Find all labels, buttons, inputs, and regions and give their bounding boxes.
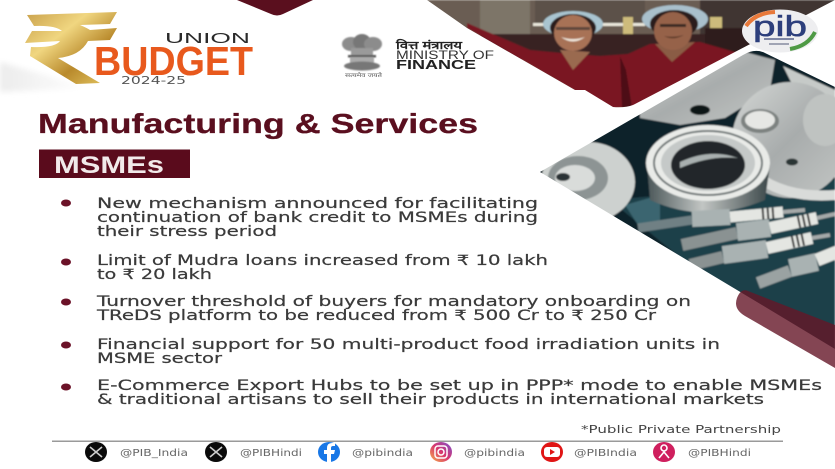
handle: PIB_India: @PIB_India — [120, 448, 188, 459]
handle: PIBIndia: @PIBIndia — [574, 448, 637, 459]
handle: pibindia: @pibindia — [352, 448, 413, 459]
UNION label: UNION — [165, 30, 250, 47]
list item: Mudra loans: Limit of Mudra loans increased from ₹ 10 lakh — [97, 253, 548, 269]
icon: Koo-style app — [653, 442, 675, 462]
handle: PIBHindi: @PIBHindi — [240, 448, 302, 459]
worker 2 — [642, 5, 708, 50]
list item: credit mechanism: New mechanism announced for facilitating — [97, 196, 538, 212]
list item: Mudra loans — [61, 253, 548, 283]
handle: pibindia: @pibindia — [464, 448, 525, 459]
list item: food irradiation — [61, 337, 720, 367]
list item: credit mechanism: continuation of bank credit to MSMEs during — [97, 210, 538, 226]
icon: PIB logo — [742, 10, 818, 52]
Union Budget logo — [25, 12, 253, 87]
finance label: FINANCE — [396, 58, 476, 72]
list item: food irradiation: MSME sector — [97, 351, 222, 367]
icon: Facebook — [318, 442, 340, 462]
list item: TReDS threshold — [61, 294, 691, 324]
list item: export hubs: & traditional artisans to sell their products in international markets — [97, 392, 764, 408]
Ministry of Finance block — [342, 34, 494, 79]
spark plugs — [638, 210, 835, 283]
BUDGET label: BUDGET — [94, 38, 253, 84]
social media footer — [85, 442, 751, 462]
year label: 2024-25 — [121, 75, 186, 87]
icon: X — [205, 442, 227, 462]
footnote: *Public Private Partnership — [581, 423, 781, 436]
photo: machine parts — [530, 45, 835, 355]
icon: Instagram — [430, 442, 452, 462]
bearing — [646, 125, 770, 212]
soft shadow behind logo — [0, 62, 90, 92]
handle: PIBHindi: @PIBHindi — [688, 448, 751, 459]
top maroon chevron — [237, 0, 313, 16]
ministry name in Hindi: वित्त मंत्रालय — [395, 38, 463, 52]
worker 1 — [543, 11, 603, 51]
icon: gold rupee — [25, 12, 117, 84]
icon: X — [85, 442, 107, 462]
icon: national emblem — [342, 34, 382, 70]
metal disc — [732, 82, 835, 200]
icon: PIB logo: pib — [753, 11, 807, 43]
workers' shirts — [467, 23, 745, 108]
list item: credit mechanism — [61, 196, 538, 240]
title: Manufacturing & Services — [38, 108, 478, 139]
section heading: MSMEs: MSMEs — [54, 152, 164, 179]
list item: TReDS threshold: TReDS platform to be reduced from ₹ 500 Cr to ₹ 250 Cr — [96, 308, 656, 324]
left bearing — [541, 142, 635, 222]
emblem motto: सत्यमेव जयते — [345, 72, 383, 79]
list item: TReDS threshold: Turnover threshold of buyers for mandatory onboarding on — [96, 294, 691, 310]
list item: credit mechanism: their stress period — [97, 224, 277, 240]
icon: YouTube — [541, 442, 563, 462]
list item: Mudra loans: to ₹ 20 lakh — [97, 267, 212, 283]
list item: export hubs — [61, 378, 822, 408]
list item: export hubs: E-Commerce Export Hubs to be set up in PPP* mode to enable MSMEs — [97, 378, 822, 394]
photo: factory workers — [420, 0, 835, 110]
section heading: MSMEs — [39, 150, 190, 179]
ministry name: MINISTRY OF — [396, 48, 494, 62]
maroon accent bar — [736, 290, 835, 368]
list item: food irradiation: Financial support for 50 multi-product food irradiation units in — [97, 337, 720, 353]
